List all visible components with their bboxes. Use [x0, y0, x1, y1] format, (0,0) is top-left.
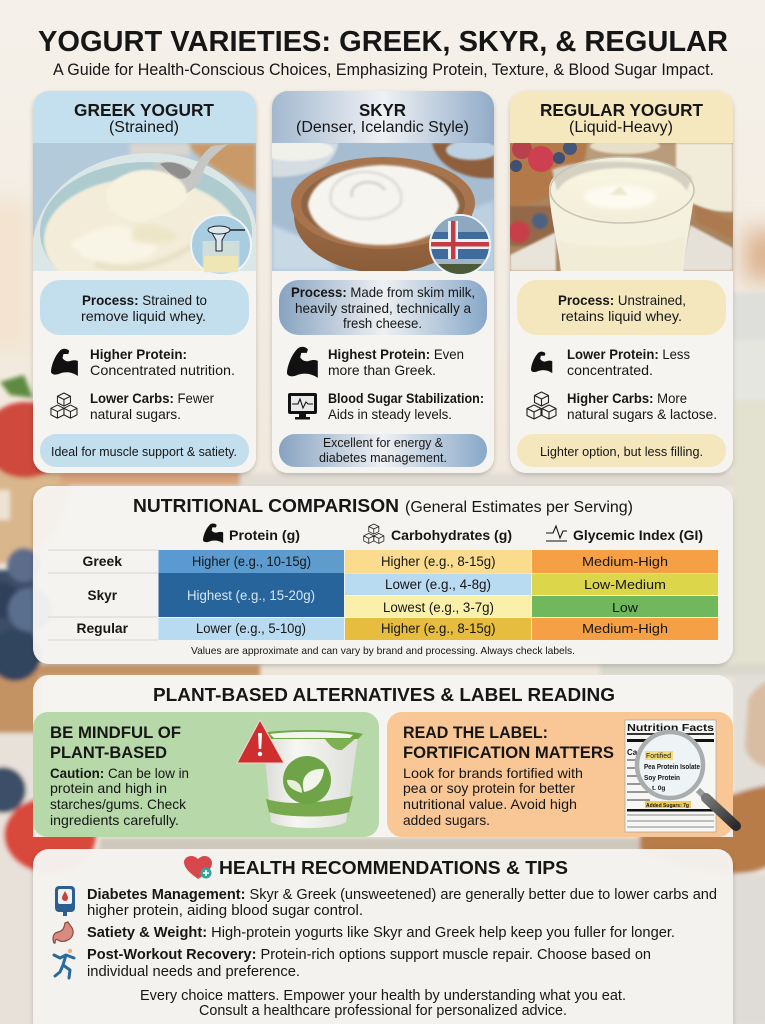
- photo: regular yogurt glass: [508, 138, 733, 271]
- label card text: added sugars.: [403, 812, 490, 828]
- cell: Regular carbs: Higher (e.g., 8-15g): [381, 621, 496, 636]
- cell: Skyr protein: Highest (e.g., 15-20g): [187, 588, 315, 603]
- plant-based card heading: BE MINDFUL OF: [50, 723, 181, 742]
- plant-based card text: ingredients carefully.: [50, 812, 179, 828]
- label card text: [403, 765, 583, 828]
- wooden bowl left: [0, 471, 240, 565]
- nutrition facts label: Added Sugars: 7g: [646, 803, 689, 809]
- cell: Skyr carbs lower: Lower (e.g., 4-8g): [385, 577, 491, 592]
- skyr blood sugar text: [328, 390, 484, 422]
- cell: Greek GI: [532, 550, 718, 573]
- cell: Regular GI: Medium-High: [582, 621, 668, 636]
- cell: Greek protein: Higher (e.g., 10-15g): [192, 554, 311, 569]
- icon: glucose meter: [55, 886, 75, 916]
- panel: Greek yogurt card: [33, 91, 256, 473]
- icon: heart-rate monitor: [288, 393, 317, 420]
- greek protein text: Concentrated nutrition.: [90, 362, 235, 378]
- skyr blood sugar text: Aids in steady levels.: [328, 406, 452, 422]
- cell: Regular protein: Lower (e.g., 5-10g): [196, 621, 306, 636]
- panel: Skyr card: [257, 91, 498, 473]
- cell: Skyr protein: [158, 573, 344, 617]
- regular protein text: Lower Protein: Less: [567, 346, 690, 362]
- icon: magnifying glass: Fortified: [646, 751, 671, 760]
- cell: Regular GI: [532, 618, 718, 640]
- greek carbs text: Lower Carbs: Fewer: [90, 390, 214, 406]
- plant-based card text: [50, 765, 189, 828]
- title: YOGURT VARIETIES: GREEK, SKYR, & REGULAR: [38, 26, 728, 58]
- strawberry bottom left: [4, 797, 96, 873]
- greek carbs text: natural sugars.: [90, 406, 181, 422]
- plant-based heading: PLANT-BASED ALTERNATIVES & LABEL READING: [153, 685, 615, 705]
- table footnote: Values are approximate and can vary by brand and processing. Always check labels.: [191, 645, 575, 657]
- nutrition facts label: [625, 720, 716, 832]
- regular summary pill: Lighter option, but less filling.: [540, 445, 703, 459]
- column header: protein: [203, 524, 300, 543]
- cell: Greek GI: Medium-High: [582, 554, 668, 569]
- skyr process pill: Process: Made from skim milk,: [291, 284, 475, 300]
- greek process pill: [40, 280, 249, 335]
- greek carbs text: [90, 390, 214, 422]
- diabetes management tip: [87, 886, 717, 919]
- regular summary pill: [517, 434, 726, 467]
- closing message: Every choice matters. Empower your health by understanding what you eat.: [140, 988, 626, 1004]
- icon: strainer over beaker: [191, 215, 251, 275]
- cell: Skyr GI low-medium: Low-Medium: [584, 577, 666, 592]
- greek summary pill: [40, 434, 249, 467]
- icon: magnifying glass: t. 0g: [652, 785, 665, 792]
- cell: Skyr carbs lowest: Lowest (e.g., 3-7g): [383, 600, 494, 615]
- greek protein text: [90, 346, 235, 378]
- regular header band: [510, 91, 733, 143]
- diabetes management tip: Diabetes Management: Skyr & Greek (unsweetened) are generally better due to lower carbs and: [87, 886, 717, 903]
- column header: glycemic index: Glycemic Index (GI): [573, 527, 703, 543]
- cell: Skyr GI low: Low: [612, 600, 639, 615]
- panel: plant-based alternatives and label reading: [33, 675, 736, 837]
- cell: Skyr GI low-medium: [532, 574, 718, 595]
- skyr protein text: more than Greek.: [328, 362, 436, 378]
- skyr protein text: [328, 346, 464, 378]
- plant-based card heading: PLANT-BASED: [50, 743, 167, 762]
- regular subheading: (Liquid-Heavy): [569, 119, 673, 136]
- skyr process pill: [279, 280, 487, 335]
- subtitle: A Guide for Health-Conscious Choices, Emphasizing Protein, Texture, & Blood Sugar Impact.: [53, 61, 714, 79]
- greek heading: GREEK YOGURT: [74, 100, 214, 120]
- skyr header band: [272, 91, 494, 143]
- satiety and weight tip: Satiety & Weight: High-protein yogurts like Skyr and Greek help keep you fuller for longer.: [87, 924, 675, 941]
- label card text: pea or soy protein for better: [403, 780, 575, 796]
- post-workout recovery tip: Post-Workout Recovery: Protein-rich options support muscle repair. Choose based on: [87, 946, 651, 963]
- icon: magnifying glass: Pea Protein Isolate: [644, 762, 700, 771]
- label card text: nutritional value. Avoid high: [403, 796, 577, 812]
- photo: skyr wooden bowl: [272, 143, 494, 271]
- greek process pill: Process: Strained to: [82, 292, 207, 308]
- regular protein text: concentrated.: [567, 362, 653, 378]
- regular process pill: retains liquid whey.: [561, 308, 682, 324]
- skyr heading: SKYR: [359, 100, 406, 120]
- cell: Greek protein: [158, 550, 344, 573]
- regular process pill: Process: Unstrained,: [558, 292, 686, 308]
- strawberry top left: [0, 402, 67, 478]
- post-workout recovery tip: [87, 946, 651, 980]
- panel: be mindful of plant-based: [33, 712, 379, 837]
- icon: sugar cubes: [51, 393, 77, 418]
- icon: plant-based yogurt cup: [262, 730, 363, 828]
- icon: magnifying glass: [637, 732, 736, 826]
- greek subheading: (Strained): [109, 119, 179, 136]
- skyr process pill: heavily strained, technically a: [295, 300, 471, 316]
- panel: Regular yogurt card: [508, 91, 733, 473]
- regular process pill: [517, 280, 726, 335]
- nutrition facts label: Ca: [627, 748, 638, 757]
- skyr process pill: fresh cheese.: [343, 315, 422, 331]
- regular carbs text: [567, 390, 717, 422]
- photo: greek yogurt bowl: [33, 143, 256, 271]
- label card heading: READ THE LABEL:: [403, 723, 548, 742]
- regular carbs text: Higher Carbs: More: [567, 390, 687, 406]
- icon: runner: [54, 949, 74, 978]
- blueberries: [7, 548, 41, 582]
- icon: warning triangle: [237, 720, 284, 763]
- milk jar on right: [733, 292, 765, 342]
- regular carbs text: natural sugars & lactose.: [567, 406, 717, 422]
- column header: carbohydrates: Carbohydrates (g): [391, 527, 512, 543]
- label card heading: FORTIFICATION MATTERS: [403, 743, 614, 762]
- icon: Iceland flag badge: [430, 215, 490, 275]
- cell: Greek carbs: Higher (e.g., 8-15g): [381, 554, 496, 569]
- row label: Greek: Greek: [82, 553, 122, 569]
- panel: read the label: [387, 712, 736, 837]
- panel: nutritional comparison: [33, 486, 733, 664]
- greek header band: [33, 91, 256, 143]
- nutrition facts label: Nutrition Facts: [627, 722, 714, 734]
- skyr blood sugar text: Blood Sugar Stabilization:: [328, 390, 484, 406]
- greek protein text: Higher Protein:: [90, 346, 187, 362]
- icon: large sugar cubes: [527, 392, 556, 419]
- icon: stomach: [53, 922, 73, 943]
- cell: Greek carbs: [345, 550, 531, 573]
- panel: health recommendations: [33, 849, 733, 1024]
- greek summary pill: Ideal for muscle support & satiety.: [51, 445, 237, 459]
- greek process pill: remove liquid whey.: [81, 308, 206, 324]
- skyr summary pill: Excellent for energy &: [323, 436, 444, 450]
- regular heading: REGULAR YOGURT: [540, 100, 703, 120]
- skyr subheading: (Denser, Icelandic Style): [296, 119, 469, 136]
- cell: Regular carbs: [345, 618, 531, 640]
- plant-based card text: protein and high in: [50, 780, 167, 796]
- icon: large muscle: [287, 347, 318, 378]
- table heading: (General Estimates per Serving): [405, 499, 633, 516]
- cell: Skyr carbs lowest: [345, 596, 531, 617]
- skyr protein text: Highest Protein: Even: [328, 346, 464, 362]
- row label: Skyr: Skyr: [88, 587, 118, 603]
- plant-based card heading: [50, 723, 181, 762]
- closing message: [140, 988, 626, 1019]
- plant-based card text: starches/gums. Check: [50, 796, 187, 812]
- cell: Regular protein: [158, 618, 344, 640]
- icon: small muscle: [531, 352, 552, 373]
- icon: heart with plus: [184, 856, 212, 879]
- table heading: NUTRITIONAL COMPARISON: [133, 496, 399, 516]
- icon: muscle: [51, 349, 78, 376]
- closing message: Consult a healthcare professional for personalized advice.: [199, 1003, 567, 1019]
- plant-based card text: Caution: Can be low in: [50, 765, 189, 781]
- skyr summary pill: diabetes management.: [319, 451, 447, 465]
- post-workout recovery tip: individual needs and preference.: [87, 963, 300, 980]
- column header: carbohydrates: [364, 524, 512, 543]
- label card text: Look for brands fortified with: [403, 765, 583, 781]
- label card heading: [403, 723, 614, 762]
- health heading: HEALTH RECOMMENDATIONS & TIPS: [219, 858, 568, 878]
- skyr summary pill: [279, 434, 487, 467]
- regular protein text: [567, 346, 690, 378]
- cell: Skyr GI low: [532, 596, 718, 617]
- column header: protein: Protein (g): [229, 527, 300, 543]
- cell: Skyr carbs lower: [345, 574, 531, 595]
- table heading: [133, 496, 633, 516]
- row label: Regular: Regular: [76, 620, 129, 636]
- icon: magnifying glass: Soy Protein: [644, 773, 680, 782]
- diabetes management tip: higher protein, aiding blood sugar control.: [87, 902, 363, 919]
